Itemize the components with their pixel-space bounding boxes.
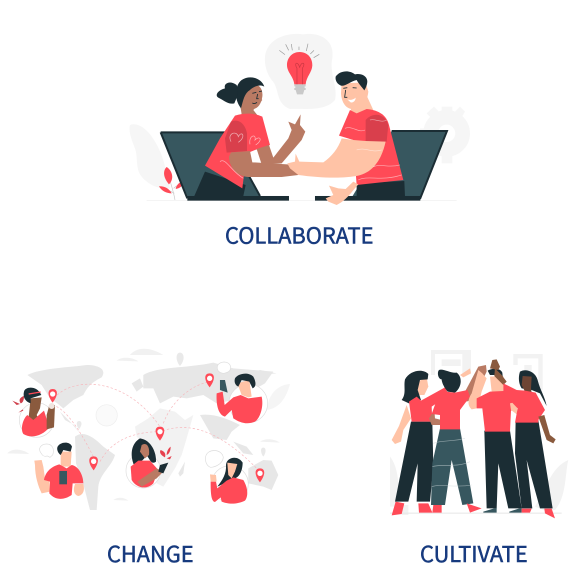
world map [7, 349, 280, 510]
route lines [52, 382, 260, 472]
gear [420, 107, 465, 163]
plant [130, 124, 185, 200]
illustration: change [7, 349, 290, 510]
grey pins [77, 353, 266, 457]
ground line [390, 512, 562, 515]
illustration: cultivate [390, 350, 568, 518]
globe icon [96, 405, 117, 426]
laptop left [161, 132, 289, 201]
person: woman [194, 77, 305, 196]
icon: light bulb [279, 44, 319, 94]
person: man [287, 71, 405, 205]
person: woman left [392, 371, 449, 515]
ground line [147, 199, 457, 202]
plant [267, 384, 290, 410]
heading: collaborate: COLLABORATE [225, 220, 373, 250]
person circle 5 [206, 450, 248, 504]
illustration: collaborate [130, 34, 465, 205]
laptop right [315, 131, 447, 201]
person circle 1 [12, 388, 55, 437]
heading: change: CHANGE [107, 538, 194, 569]
person: man [469, 369, 522, 513]
map pins [49, 373, 264, 482]
thought blob [265, 34, 336, 109]
person circle 4 [217, 362, 268, 423]
heading: cultivate: CULTIVATE [420, 538, 528, 569]
background frames [390, 350, 568, 515]
person: woman back [429, 365, 487, 513]
person circle 2 [34, 443, 84, 499]
person circle 3 [126, 438, 172, 488]
person: woman right [490, 359, 556, 518]
